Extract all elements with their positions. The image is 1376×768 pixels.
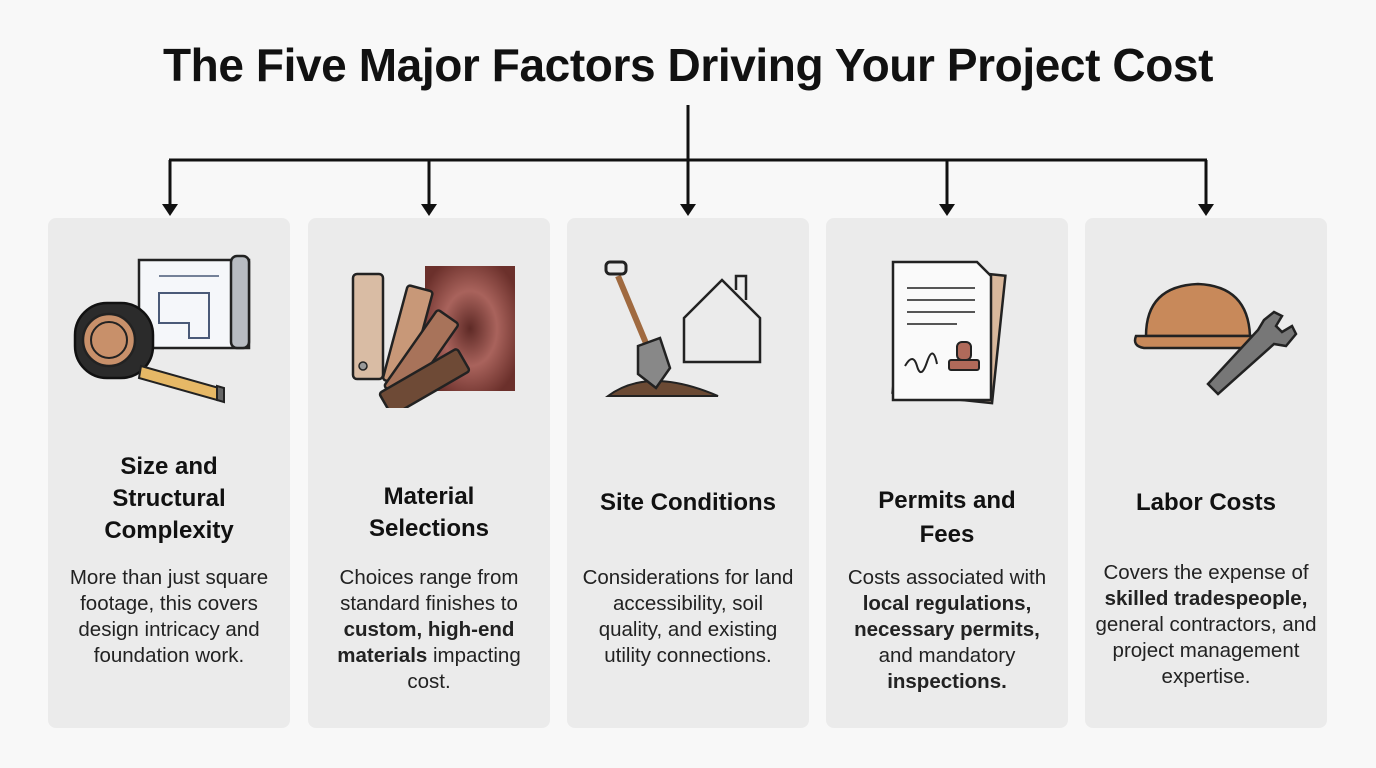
- text: custom, high-end: [344, 618, 514, 641]
- text: inspections.: [887, 670, 1007, 693]
- text: [583, 566, 793, 667]
- icon: tape measure and blueprint: [74, 254, 250, 404]
- text: [848, 566, 1046, 693]
- text: necessary permits,: [854, 618, 1040, 641]
- text: utility connections.: [604, 644, 772, 667]
- text: Choices range from: [340, 566, 518, 589]
- text: [70, 566, 268, 667]
- connector arrows: [162, 105, 1214, 216]
- panel: size: [48, 218, 290, 728]
- text: cost.: [407, 670, 451, 693]
- panel: materials: [308, 218, 550, 728]
- heading: [369, 483, 489, 542]
- panel: site: [567, 218, 809, 728]
- heading: Fees: [920, 521, 974, 548]
- text: quality, and existing: [599, 618, 777, 641]
- heading: Selections: [369, 515, 489, 542]
- icon: shovel and house: [604, 260, 762, 397]
- heading: Material: [384, 483, 474, 510]
- heading: [878, 487, 1016, 548]
- icon: documents with stamp: [891, 260, 1007, 404]
- heading: [104, 453, 234, 544]
- heading: Size and: [120, 453, 218, 480]
- heading: Structural: [112, 485, 226, 512]
- text: and mandatory: [879, 644, 1015, 667]
- text: general contractors, and: [1095, 613, 1317, 636]
- icon: hard hat and wrench: [1134, 282, 1298, 396]
- title: The Five Major Factors Driving Your Project Cost: [163, 39, 1213, 91]
- text: skilled tradespeople,: [1105, 587, 1307, 610]
- text: footage, this covers: [80, 592, 258, 615]
- text: standard finishes to: [340, 592, 518, 615]
- text: [1095, 561, 1317, 688]
- icon: swatches and fabric: [352, 266, 515, 408]
- heading: Complexity: [104, 517, 234, 544]
- panel: permits: [826, 218, 1068, 728]
- text: expertise.: [1162, 665, 1250, 688]
- text: Covers the expense of: [1103, 561, 1309, 584]
- text: [337, 566, 521, 693]
- text: design intricacy and: [78, 618, 260, 641]
- text: accessibility, soil: [613, 592, 763, 615]
- panel: labor: [1085, 218, 1327, 728]
- text: project management: [1113, 639, 1299, 662]
- heading: Permits and: [878, 487, 1016, 514]
- text: materials impacting: [337, 644, 521, 667]
- text: local regulations,: [863, 592, 1031, 615]
- text: Considerations for land: [583, 566, 793, 589]
- heading: Site Conditions: [600, 489, 776, 516]
- text: foundation work.: [94, 644, 244, 667]
- text: Costs associated with: [848, 566, 1046, 589]
- heading: Labor Costs: [1136, 489, 1276, 516]
- text: More than just square: [70, 566, 268, 589]
